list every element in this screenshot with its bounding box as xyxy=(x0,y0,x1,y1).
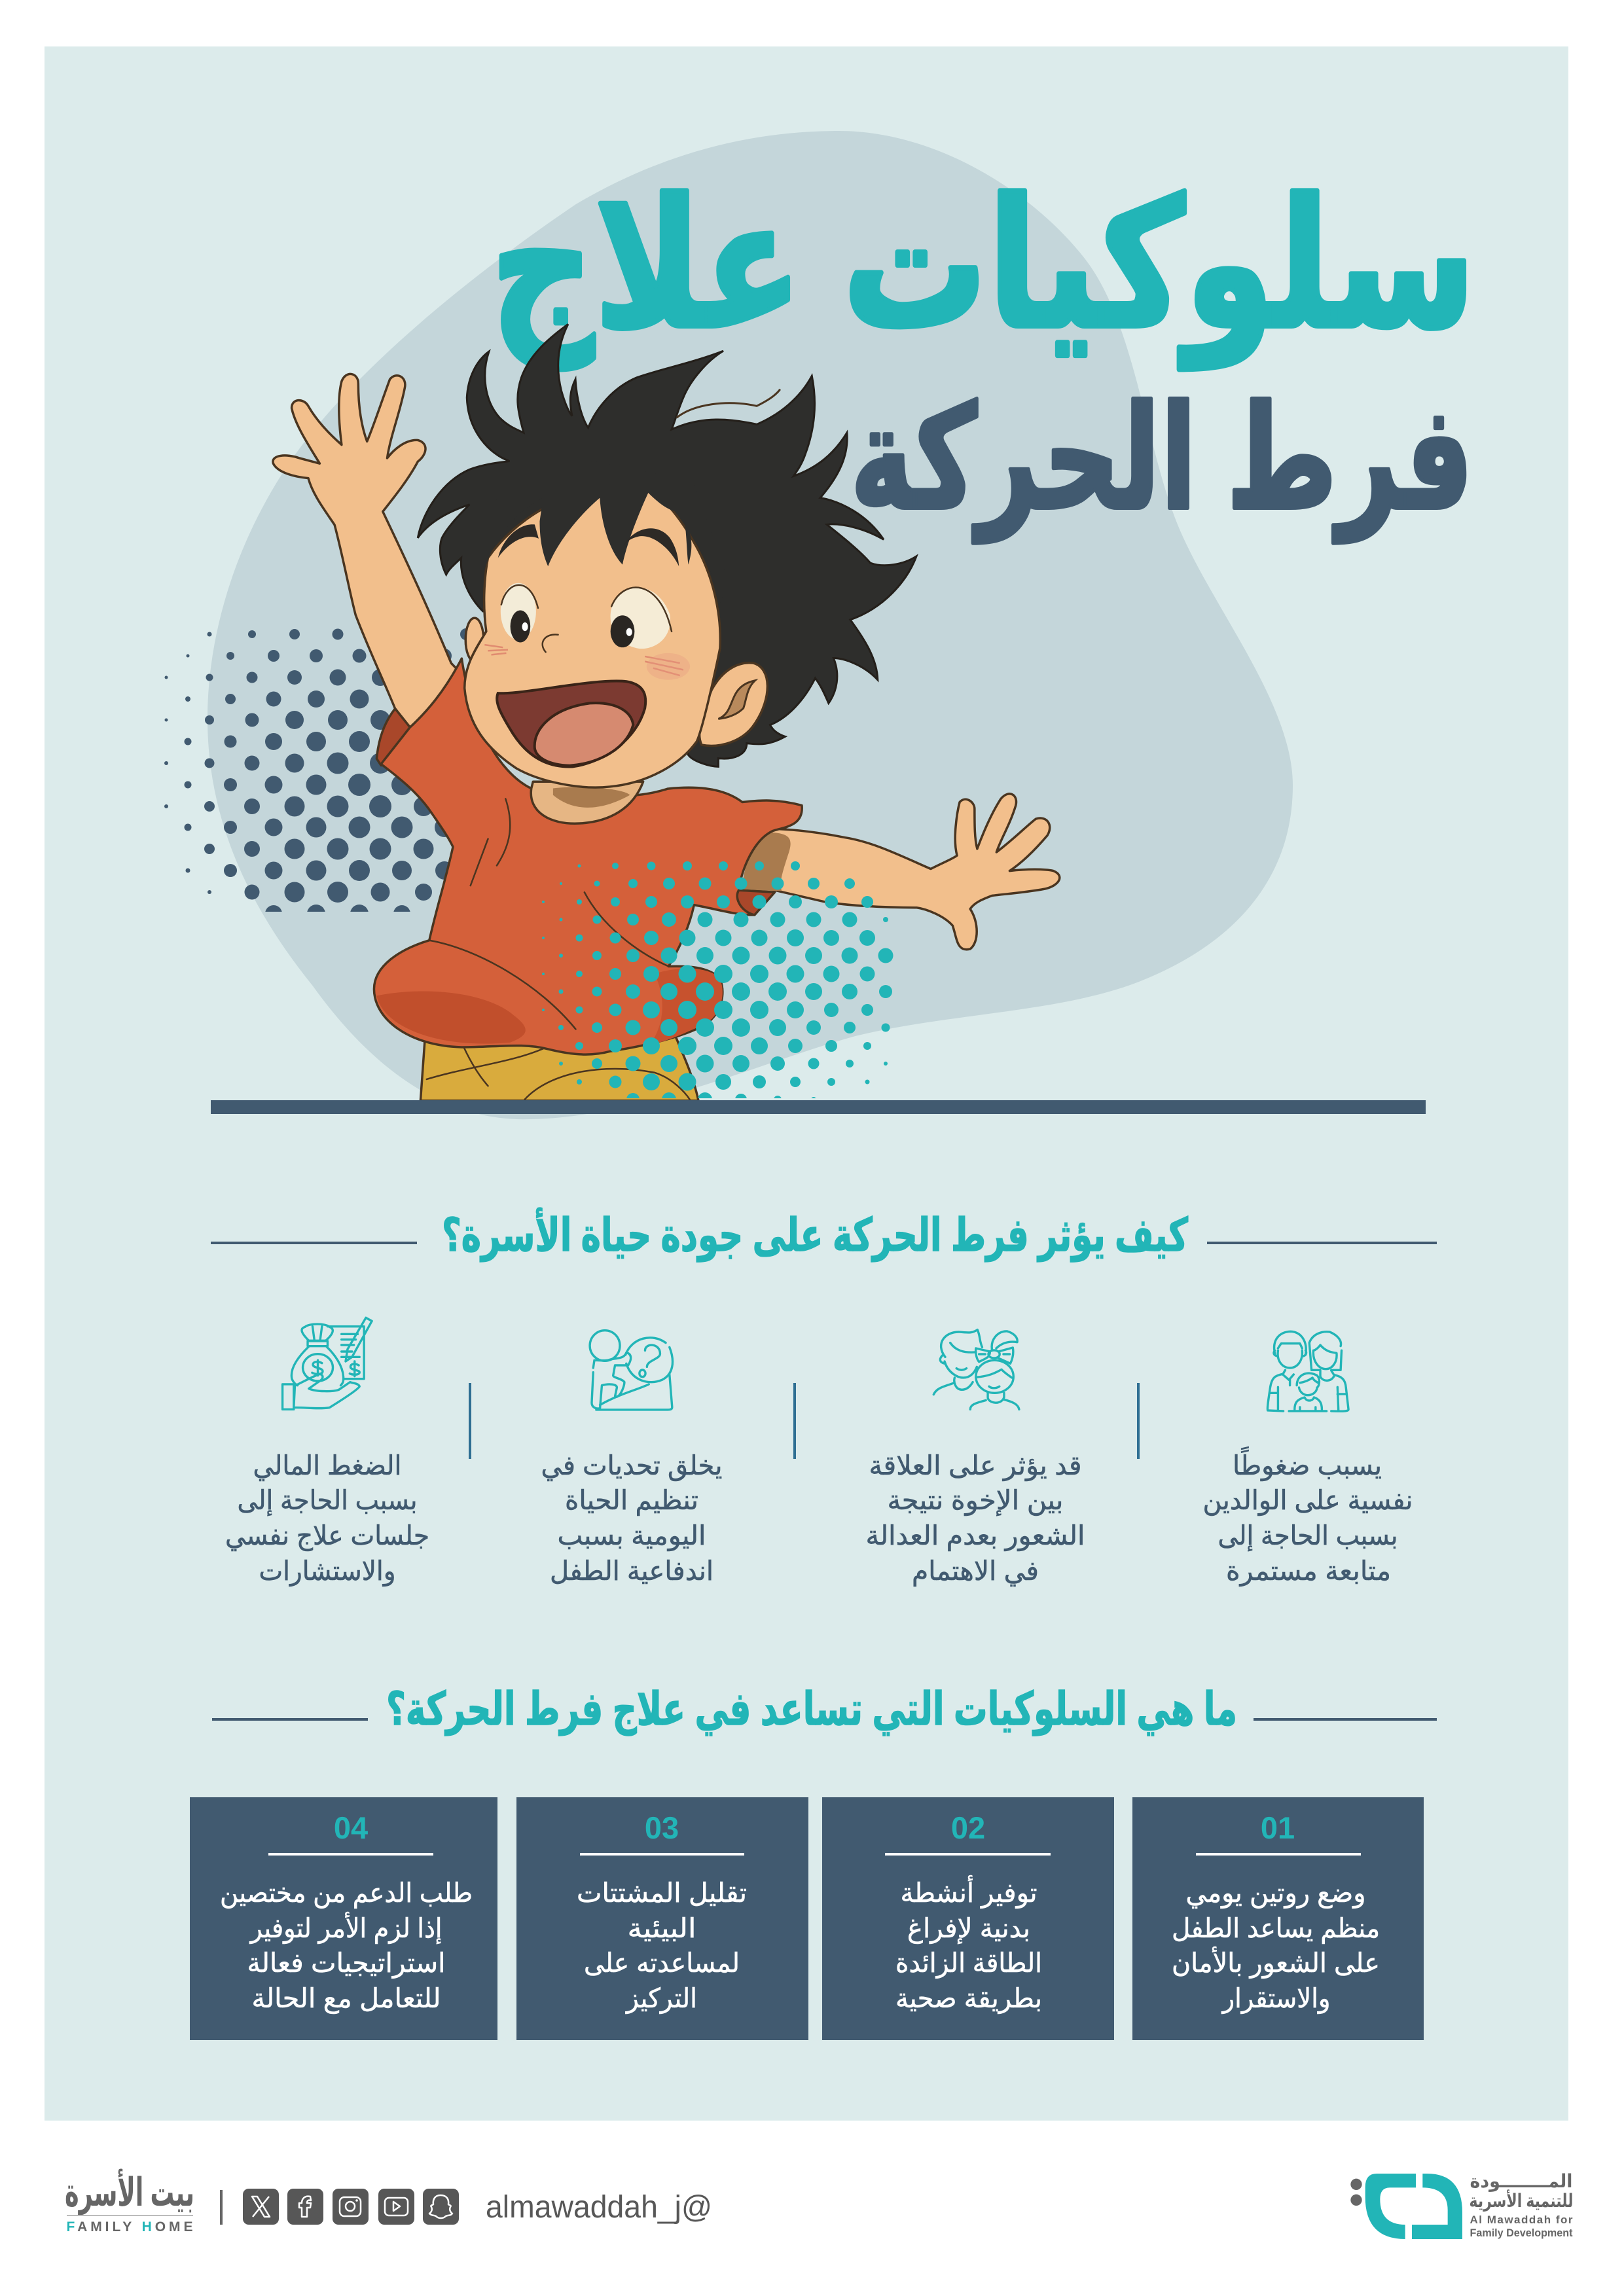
logo wordmark: Al Mawaddah for xyxy=(1470,2214,1573,2226)
card 01 xyxy=(1132,1797,1424,2040)
right ear xyxy=(700,663,767,745)
text: بسبب الحاجة إلى xyxy=(1218,1520,1398,1551)
inner ear xyxy=(718,681,755,719)
card 04: للتعامل مع الحالة xyxy=(251,1983,441,2014)
nose xyxy=(543,635,558,652)
sleeve inner xyxy=(376,709,410,765)
logo wordmark: للتنمية الأسرية xyxy=(1469,2189,1574,2212)
text: يخلق تحديات في xyxy=(541,1450,723,1482)
divider xyxy=(793,1383,796,1459)
card 03: 03 xyxy=(645,1810,679,1845)
card 03 xyxy=(516,1797,808,2040)
sleeve opening xyxy=(737,890,774,915)
left ear xyxy=(465,618,484,662)
blush xyxy=(484,645,683,675)
halftone dots: navy xyxy=(164,628,472,923)
column: financial pressure xyxy=(225,1318,429,1587)
text: اندفاعية الطفل xyxy=(550,1556,713,1586)
text: قد يؤثر على العلاقة xyxy=(869,1450,1081,1481)
card 03: تقليل المشتتات xyxy=(577,1878,747,1908)
card 04 xyxy=(190,1797,497,2040)
eyebrow right xyxy=(623,528,679,566)
shorts xyxy=(420,1033,698,1101)
card 01: 01 xyxy=(1261,1810,1295,1845)
hair back xyxy=(418,324,916,766)
text: اليومية بسبب xyxy=(558,1520,706,1551)
card 04: طلب الدعم من مختصين xyxy=(220,1878,473,1909)
icon: Facebook xyxy=(287,2189,323,2225)
illustration: cheering boy xyxy=(273,324,1060,1101)
face xyxy=(465,484,720,787)
shirt right shade xyxy=(650,969,723,1045)
icon: X xyxy=(243,2189,279,2225)
logo mark xyxy=(1350,2174,1462,2239)
shirt hem shade xyxy=(376,992,526,1044)
logo wordmark: Family Development xyxy=(1470,2227,1573,2239)
tongue xyxy=(535,703,633,766)
icon: YouTube xyxy=(378,2189,414,2225)
card 01: على الشعور بالأمان xyxy=(1172,1946,1380,1979)
footer: Family Home logo: FAMILY HOME xyxy=(67,2219,192,2234)
footer: Family Home logo: بيت الأسرة xyxy=(65,2168,194,2215)
card 02: بدنية لإفراغ xyxy=(907,1913,1030,1944)
card 04: 04 xyxy=(334,1810,368,1845)
text xyxy=(225,1450,429,1587)
text xyxy=(865,1450,1085,1587)
text: نفسية على الوالدين xyxy=(1203,1485,1413,1516)
divider xyxy=(469,1383,471,1459)
boy head xyxy=(418,324,916,823)
extended arm and hand xyxy=(751,794,1060,950)
stray hair xyxy=(677,389,780,418)
hero base bar xyxy=(211,1100,1426,1114)
neck xyxy=(531,781,643,823)
card 04: إذا لزم الأمر لتوفير xyxy=(249,1911,442,1944)
cuff shade on arm xyxy=(742,832,791,891)
text: الضغط المالي xyxy=(253,1450,402,1482)
icon: money bag in hand xyxy=(283,1318,372,1409)
shorts folds xyxy=(427,1043,690,1100)
card 04: استراتيجيات فعالة xyxy=(247,1948,445,1979)
text: يسبب ضغوطًا xyxy=(1233,1446,1382,1481)
text: تنظيم الحياة xyxy=(565,1485,698,1516)
card 03: البيئية xyxy=(627,1913,696,1943)
heading: behaviours section: ما هي السلوكيات التي تساعد في علاج فرط الحركة؟ xyxy=(386,1683,1237,1736)
shirt folds xyxy=(429,798,668,1029)
column: siblings xyxy=(865,1330,1085,1587)
neck shadow xyxy=(553,787,630,808)
logo wordmark xyxy=(1469,2171,1574,2239)
halftone dots: teal xyxy=(542,861,893,1107)
text: الشعور بعدم العدالة xyxy=(865,1520,1085,1551)
icon: Snapchat xyxy=(423,2189,459,2225)
card 02: بطريقة صحية xyxy=(895,1983,1042,2014)
heading: impact section: كيف يؤثر فرط الحركة على جودة حياة الأسرة؟ xyxy=(442,1208,1188,1262)
text: بين الإخوة نتيجة xyxy=(888,1485,1063,1516)
bangs xyxy=(485,483,719,607)
card 01: منظم يساعد الطفل xyxy=(1172,1913,1380,1944)
logo wordmark: المــــــــودة xyxy=(1470,2171,1572,2192)
blob shape behind hero xyxy=(208,131,1293,1119)
text: جلسات علاج نفسي xyxy=(225,1520,429,1552)
footer separator xyxy=(220,2190,223,2225)
card 03: لمساعدته على xyxy=(584,1948,740,1978)
raised arm and hand xyxy=(273,374,466,735)
icon: siblings xyxy=(933,1330,1019,1409)
card 02: توفير أنشطة xyxy=(901,1875,1037,1909)
text xyxy=(1203,1446,1413,1587)
social handle: almawaddah_j@ xyxy=(486,2190,712,2225)
card 01: وضع روتين يومي xyxy=(1186,1878,1365,1909)
card 02 xyxy=(822,1797,1114,2040)
text xyxy=(541,1450,723,1586)
shirt xyxy=(374,658,802,1054)
title xyxy=(490,165,1476,543)
eye right xyxy=(611,588,670,649)
column: parents stress xyxy=(1203,1331,1413,1587)
icon: climbing question xyxy=(590,1331,672,1410)
icon: Instagram xyxy=(333,2189,369,2225)
mouth xyxy=(497,681,645,766)
card 01: والاستقرار xyxy=(1221,1983,1330,2014)
text: متابعة مستمرة xyxy=(1226,1556,1391,1587)
icon: family xyxy=(1267,1331,1348,1411)
divider xyxy=(1137,1383,1140,1459)
boy body xyxy=(273,374,1060,1101)
eye left xyxy=(501,583,536,639)
eyebrow left xyxy=(498,524,539,558)
text: في الاهتمام xyxy=(912,1556,1039,1587)
text: والاستشارات xyxy=(259,1556,395,1587)
card 03: التركيز xyxy=(625,1983,697,2014)
card 02: الطاقة الزائدة xyxy=(895,1948,1042,1979)
footer: Al Mawaddah logo xyxy=(1350,2171,1574,2239)
card 02: 02 xyxy=(951,1810,985,1845)
column: daily challenges xyxy=(541,1331,723,1586)
footer: Family Home logo xyxy=(65,2168,194,2234)
text: بسبب الحاجة إلى xyxy=(237,1485,418,1516)
